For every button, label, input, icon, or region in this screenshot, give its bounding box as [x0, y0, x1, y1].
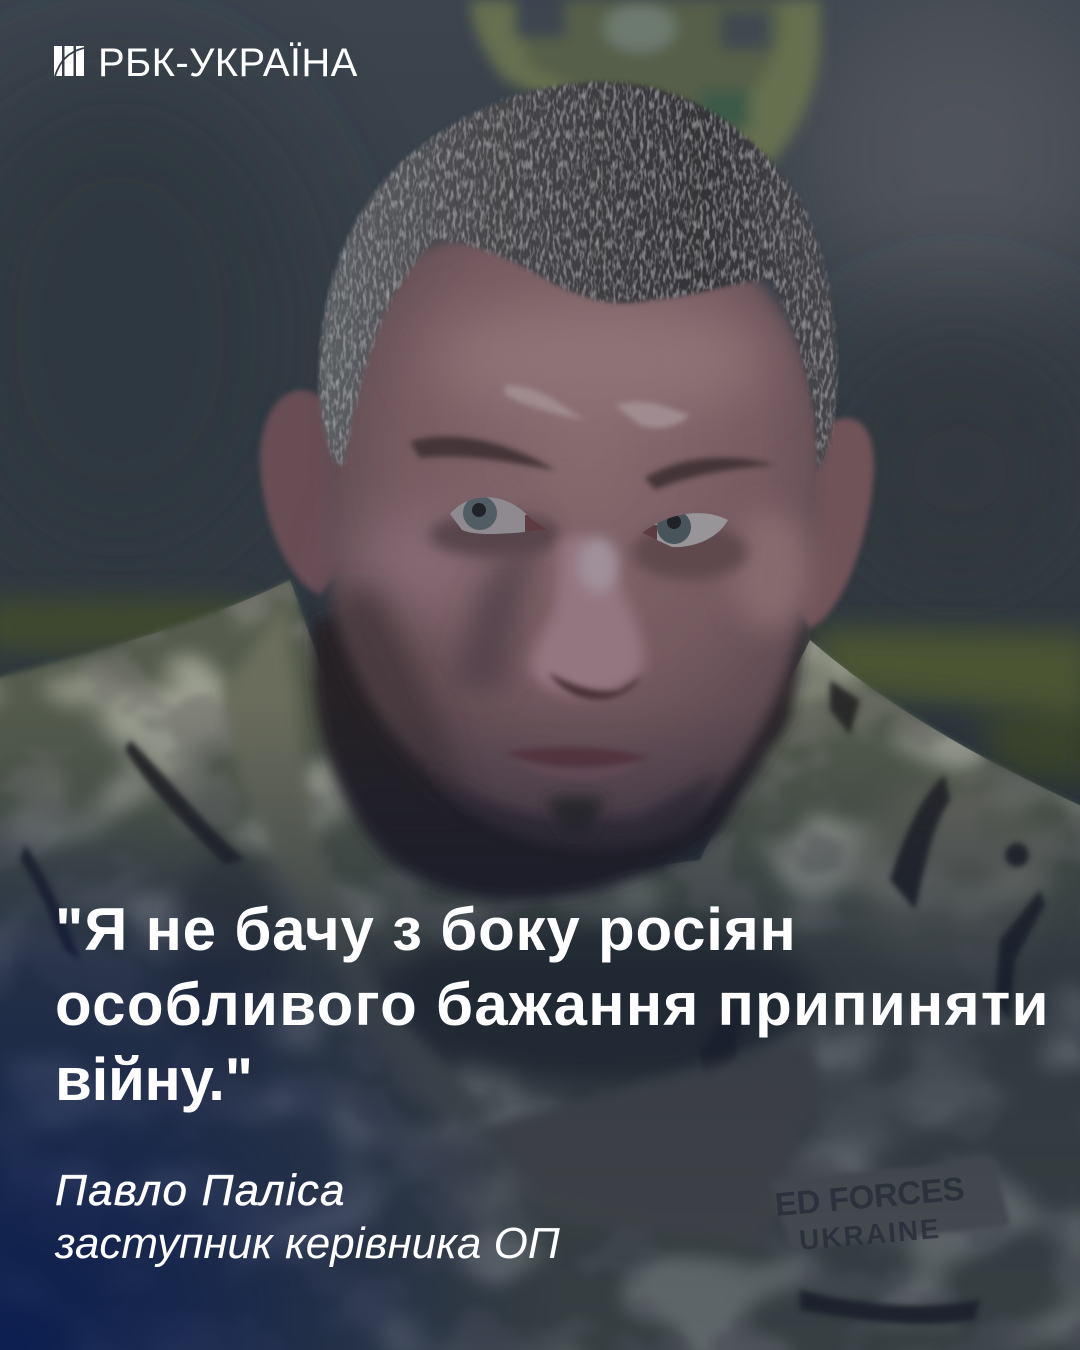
attribution [54, 1166, 560, 1268]
jacket collar fold [470, 1040, 825, 1250]
quote heading [55, 896, 1050, 1113]
hair [319, 82, 837, 470]
logo icon [54, 46, 84, 76]
nose [531, 535, 644, 700]
eyebrows [410, 437, 775, 490]
camouflage light patches [0, 580, 1080, 1350]
camouflage dark patches [0, 580, 1080, 1350]
ears [260, 390, 874, 628]
eye: left [450, 497, 548, 534]
face [325, 230, 822, 842]
mouth [505, 747, 650, 779]
quote heading: особливого бажання припиняти [55, 971, 1050, 1038]
stubble shadow on jaw [420, 760, 720, 847]
quote heading: "Я не бачу з боку росіян [55, 896, 797, 963]
jacket collar strip [225, 600, 490, 1130]
shoulder patch [770, 1160, 1010, 1256]
background green lettering bands [0, 600, 1080, 790]
neck and beard [312, 560, 805, 900]
eye sockets [429, 513, 561, 557]
forehead highlight [430, 305, 770, 415]
attribution: Павло Паліса [55, 1166, 346, 1215]
goatee [545, 796, 605, 835]
logo: РБК-Україна [54, 41, 358, 85]
quote heading: війну." [55, 1046, 253, 1113]
shoulder patch: UKRAINE [798, 1213, 940, 1256]
jacket: camouflage [0, 580, 1080, 1350]
logo wordmark: РБК-УКРАЇНА [98, 41, 358, 85]
attribution: заступник керівника ОП [55, 1219, 560, 1268]
cheek highlights [355, 510, 495, 610]
face shadow sides [335, 590, 470, 810]
background emblem [470, 0, 820, 165]
shadow beside nose [450, 510, 545, 690]
shoulder patch: ED FORCES [773, 1170, 966, 1223]
eye: right [642, 513, 728, 548]
